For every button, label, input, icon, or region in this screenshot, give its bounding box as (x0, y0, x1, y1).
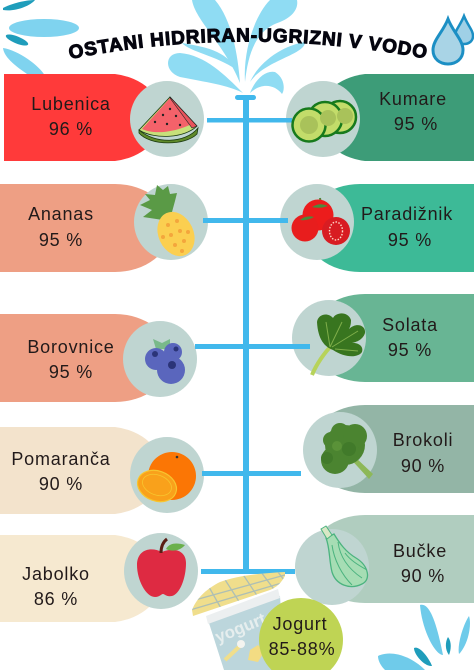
Jogurt badge (259, 598, 343, 670)
label: Brokoli (393, 430, 453, 476)
splash bottom right (378, 605, 470, 670)
label: Lubenica (31, 94, 111, 139)
label: Paradiznik: 95 % (388, 230, 432, 250)
label: Bucke: Bučke (393, 541, 447, 561)
label: Ananas: Ananas (28, 204, 94, 224)
label: Lubenica: 96 % (49, 119, 93, 139)
label: Lubenica: Lubenica (31, 94, 111, 114)
label: Pomaranca: 90 % (39, 474, 83, 494)
icon: watermelon (139, 97, 198, 143)
icon circles (123, 81, 377, 609)
label: Solata: Solata (382, 315, 438, 335)
panel: Paradiznik (304, 184, 474, 272)
icon: yogurt: yogurt (212, 609, 269, 647)
label: Kumare (379, 89, 447, 134)
icon: broccoli (321, 423, 373, 479)
label: Jabolko: 86 % (34, 589, 78, 609)
label: Kumare: 95 % (394, 114, 438, 134)
label: Pomaranca (11, 449, 111, 494)
icon: orange (133, 452, 196, 507)
water splash fountain (168, 0, 305, 94)
label: Solata (382, 315, 438, 360)
icon: tomatoes (292, 198, 350, 245)
icon: blueberries (145, 339, 185, 384)
panel: Bucke (309, 515, 474, 603)
label: Borovnice: 95 % (49, 362, 93, 382)
panel: Solata (309, 294, 474, 382)
icon: squash (321, 526, 368, 587)
label: Borovnice: Borovnice (27, 337, 115, 357)
label: Borovnice (27, 337, 115, 382)
label: Solata: 95 % (388, 340, 432, 360)
panel: Pomaranca (0, 427, 163, 514)
title: OSTANI HIDRIRAN-UGRIZNI V VODO (68, 28, 427, 58)
Jogurt badge: Jogurt (273, 614, 327, 634)
label: Brokoli: Brokoli (393, 430, 453, 450)
icon: apple (137, 539, 186, 597)
label: Jabolko (22, 564, 90, 609)
icon: yogurt (192, 572, 285, 670)
panel: Lubenica (4, 74, 163, 161)
icon: pineapple (140, 185, 202, 262)
panel: Jabolko (0, 535, 163, 622)
pipe (195, 95, 310, 574)
panel: Borovnice (0, 314, 171, 402)
panel: Ananas (0, 184, 171, 272)
panel: Kumare (317, 74, 474, 161)
label: Brokoli: 90 % (401, 456, 445, 476)
label: Kumare: Kumare (379, 89, 447, 109)
Jogurt badge: 85-88% (269, 639, 335, 659)
panel: Brokoli (309, 405, 474, 493)
label: Bucke (393, 541, 447, 586)
label: Paradiznik: Paradižnik (361, 204, 453, 224)
splash top left (3, 0, 79, 79)
label: Bucke: 90 % (401, 566, 445, 586)
label: Pomaranca: Pomaranča (11, 449, 111, 469)
label: Paradiznik (361, 204, 453, 250)
icon: lettuce (312, 313, 365, 375)
icon: cucumber (292, 101, 356, 142)
icon: water drops (433, 16, 473, 64)
label: Ananas: 95 % (39, 230, 83, 250)
label: Jabolko: Jabolko (22, 564, 90, 584)
label: Ananas (28, 204, 94, 250)
